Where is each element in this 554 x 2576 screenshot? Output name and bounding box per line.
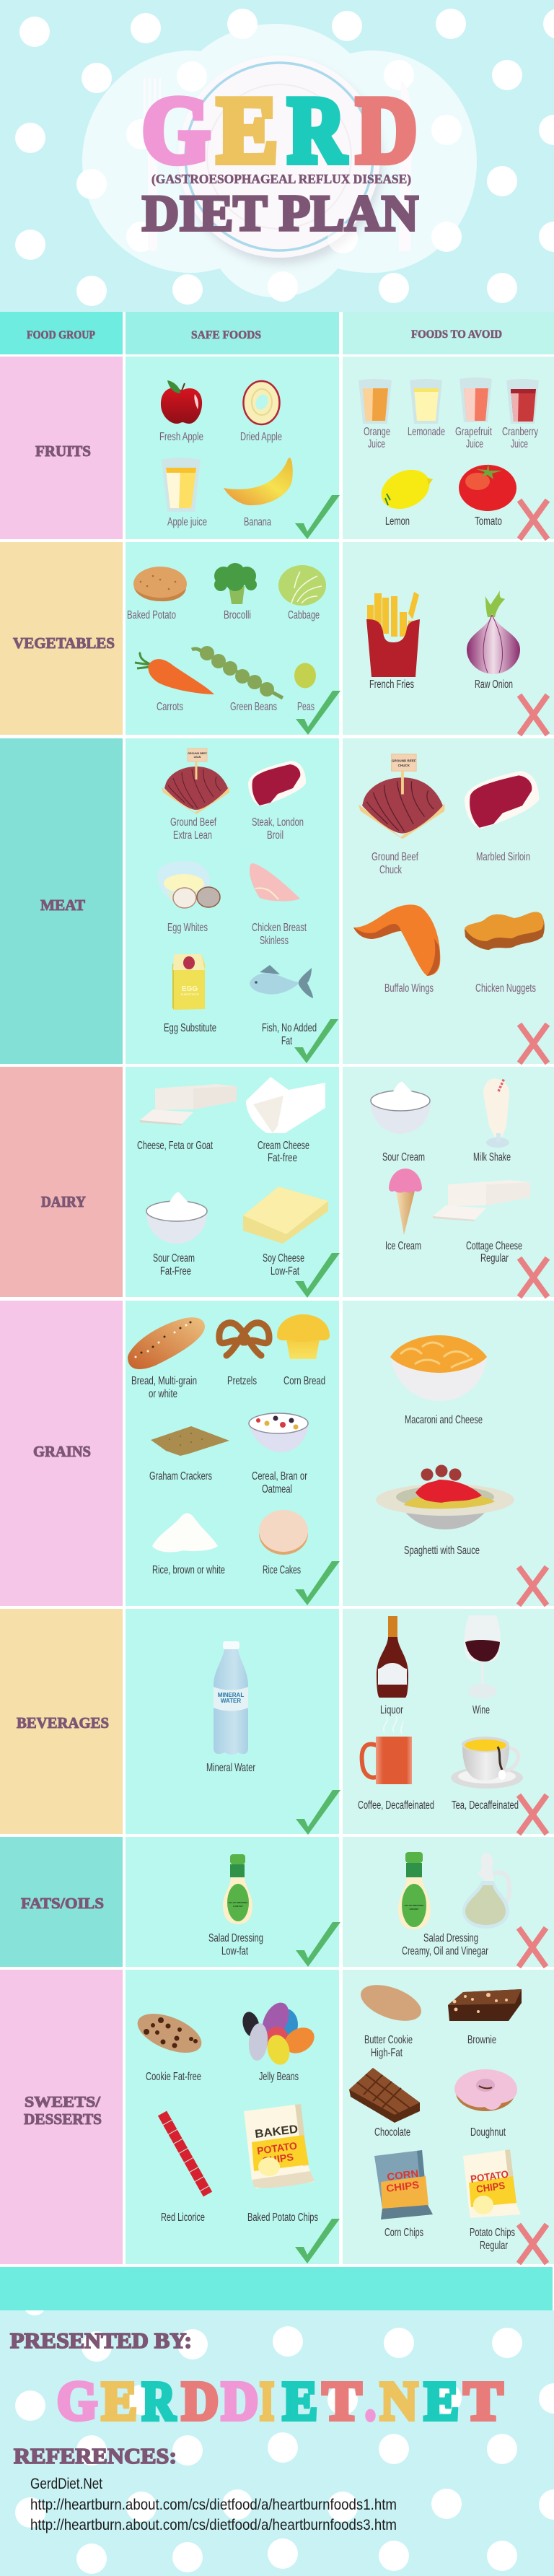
icon: mineral water bottle bbox=[214, 1641, 248, 1755]
icon: egg substitute carton: EGG bbox=[182, 985, 198, 993]
icon: grapefruit juice bbox=[460, 377, 492, 422]
panel: beverages bbox=[0, 1609, 554, 1835]
header banner bbox=[0, 0, 554, 312]
label: egg substitute: Egg Substitute bbox=[164, 1022, 216, 1034]
icon: salad dressing low-fat bbox=[223, 1854, 252, 1924]
logo: gerddiet.net: D bbox=[221, 2371, 258, 2432]
label: butter cookie high-fat: High-Fat bbox=[371, 2047, 403, 2059]
icon: sour cream fat-free bbox=[146, 1192, 207, 1244]
icon: steak london broil bbox=[248, 761, 306, 806]
icon: orange juice bbox=[359, 379, 392, 424]
icon: french fries bbox=[366, 592, 420, 677]
icon: salad dressing low-fat: SALAD DRESSING bbox=[229, 1901, 248, 1904]
icon: carrots bbox=[135, 652, 214, 694]
icon: check mark bbox=[296, 1922, 340, 1967]
label: butter cookie high-fat: Butter Cookie bbox=[364, 2034, 413, 2046]
icon: liquor bottle bbox=[377, 1616, 408, 1698]
logo: gerddiet.net: T bbox=[322, 2371, 361, 2432]
label: cottage cheese regular: Regular bbox=[480, 1252, 509, 1265]
label: potato chips regular: Regular bbox=[480, 2240, 508, 2252]
label: bread multi-grain: or white bbox=[149, 1388, 177, 1400]
icon: lemonade bbox=[410, 379, 442, 424]
label: cereal bran or oatmeal: Oatmeal bbox=[262, 1483, 292, 1496]
icon: check mark bbox=[294, 1019, 338, 1063]
panel: sweets and desserts bbox=[0, 1970, 554, 2264]
title: GERD: G bbox=[142, 78, 210, 183]
label: sour cream fat-free: Fat-Free bbox=[160, 1265, 191, 1278]
icon: x mark bbox=[519, 1795, 547, 1834]
icon: egg whites bbox=[157, 861, 220, 908]
icon: sour cream bbox=[371, 1082, 431, 1134]
icon: pretzel bbox=[219, 1323, 269, 1355]
heading: grains: GRAINS bbox=[33, 1443, 91, 1460]
label: lemon: Lemon bbox=[385, 515, 410, 528]
footer polka-dot background bbox=[0, 2292, 554, 2576]
label: soy cheese low-fat: Low-Fat bbox=[271, 1265, 299, 1278]
icon: chocolate bar bbox=[349, 2068, 420, 2123]
text block: reference list bbox=[30, 2476, 397, 2533]
label: salad dressing creamy oil and vinegar bbox=[402, 1932, 488, 1957]
label: ground beef chuck: Ground Beef bbox=[371, 851, 419, 863]
icon: lemon bbox=[375, 463, 436, 516]
icon: corn chips: CHIPS bbox=[385, 2178, 420, 2194]
label: egg whites: Egg Whites bbox=[167, 922, 208, 934]
icon: chicken nuggets bbox=[465, 912, 545, 950]
icon: baked potato chips: POTATO bbox=[256, 2139, 298, 2157]
label: rice cakes: Rice Cakes bbox=[263, 1564, 301, 1576]
icon: fish bbox=[250, 965, 313, 998]
label: butter cookie high-fat bbox=[364, 2034, 413, 2059]
panel: grains bbox=[0, 1301, 554, 1606]
icon: check mark bbox=[295, 2219, 340, 2263]
icon: green beans bbox=[192, 646, 283, 698]
label: salad dressing low-fat: Salad Dressing bbox=[208, 1932, 263, 1944]
label: orange juice: Orange bbox=[364, 426, 390, 438]
label: brownie: Brownie bbox=[467, 2034, 496, 2046]
icon: x mark bbox=[519, 500, 548, 539]
label: jelly beans: Jelly Beans bbox=[259, 2071, 299, 2083]
label: baked potato: Baked Potato bbox=[127, 609, 176, 621]
table header row: FOOD GROUP bbox=[27, 329, 95, 341]
icon: potato chips regular: POTATO bbox=[470, 2168, 509, 2185]
icon: raw onion bbox=[467, 590, 520, 674]
heading: presented by: PRESENTED BY: bbox=[10, 2328, 192, 2353]
label: cookie fat-free: Cookie Fat-free bbox=[146, 2071, 201, 2083]
teal bar bbox=[0, 2267, 553, 2310]
label: cream cheese fat-free bbox=[258, 1140, 309, 1164]
label: cereal bran or oatmeal bbox=[252, 1470, 307, 1496]
title: GERD: D bbox=[356, 78, 417, 183]
title: GERD bbox=[142, 78, 417, 183]
icon: buffalo wings bbox=[353, 904, 440, 976]
logo: gerddiet.net: G bbox=[57, 2371, 97, 2432]
icon: ground beef extra lean bbox=[162, 748, 229, 814]
heading: fruits: FRUITS bbox=[35, 442, 91, 460]
label: potato chips regular: Potato Chips bbox=[470, 2227, 515, 2239]
icon: tomato bbox=[459, 463, 516, 511]
icon: ground beef chuck bbox=[359, 754, 444, 839]
panel: meat bbox=[0, 738, 554, 1064]
label: fish no added fat: Fat bbox=[281, 1035, 292, 1047]
label: ground beef chuck: Chuck bbox=[379, 864, 402, 876]
label: dried apple: Dried Apple bbox=[240, 431, 282, 443]
icon: check mark bbox=[296, 691, 340, 735]
title: GERD: R bbox=[288, 78, 346, 183]
icon: ice cream bbox=[389, 1169, 422, 1235]
label: ice cream: Ice Cream bbox=[385, 1240, 421, 1252]
icon: corn bread bbox=[277, 1314, 330, 1359]
table header row: FOODS TO AVOID bbox=[411, 328, 502, 341]
icon: marbled sirloin bbox=[465, 771, 539, 829]
table header row: SAFE FOODS bbox=[191, 329, 261, 341]
icon: cereal bbox=[249, 1413, 309, 1452]
icon: salad dressing creamy: SALAD DRESSING bbox=[405, 1904, 424, 1907]
text block: reference list: http://heartburn.about.com/cs/dietfood/a/heartburnfoods1.htm bbox=[30, 2497, 397, 2513]
heading: references: REFERENCES: bbox=[14, 2443, 177, 2468]
logo: gerddiet.net: E bbox=[102, 2371, 137, 2432]
title: GERD: E bbox=[217, 78, 278, 183]
label: ground beef extra lean: Ground Beef bbox=[170, 816, 216, 829]
logo: gerddiet.net: D bbox=[182, 2371, 219, 2432]
label: salad dressing creamy oil and vinegar: Salad Dressing bbox=[423, 1932, 478, 1944]
icon: rice cakes bbox=[259, 1510, 308, 1555]
icon: ground beef extra lean: GROUND BEEF bbox=[188, 752, 208, 755]
label: steak london broil: Broil bbox=[267, 829, 283, 842]
icon: check mark bbox=[295, 1253, 340, 1298]
icon: check mark bbox=[296, 1790, 340, 1835]
text block: reference list: GerdDiet.Net bbox=[30, 2476, 102, 2492]
icon: mineral water bottle: MINERAL bbox=[218, 1692, 244, 1698]
heading: sweets and desserts: SWEETS/ bbox=[25, 2093, 101, 2110]
label: cheese feta or goat: Cheese, Feta or Goat bbox=[137, 1140, 213, 1152]
label: chicken breast skinless bbox=[252, 922, 307, 947]
icon: fresh apple bbox=[161, 380, 202, 424]
icon: ground beef chuck: GROUND BEEF bbox=[392, 759, 416, 762]
icon: soy cheese bbox=[243, 1187, 328, 1244]
icon: potato chips regular: CHIPS bbox=[475, 2180, 506, 2195]
label: sour cream fat-free bbox=[153, 1252, 195, 1278]
label: macaroni and cheese: Macaroni and Cheese bbox=[405, 1414, 483, 1426]
label: wine: Wine bbox=[472, 1704, 490, 1716]
icon: baked potato bbox=[133, 567, 187, 601]
label: fish no added fat bbox=[262, 1022, 317, 1047]
logo: gerddiet.net bbox=[57, 2371, 503, 2432]
heading: sweets and desserts bbox=[24, 2093, 102, 2128]
label: salad dressing low-fat: Low-fat bbox=[221, 1945, 248, 1957]
icon: egg substitute carton bbox=[172, 954, 205, 1010]
logo: gerddiet.net: T bbox=[464, 2371, 503, 2432]
icon: fork bbox=[144, 78, 161, 251]
icon: x mark bbox=[519, 695, 548, 735]
icon: oil and vinegar cruet bbox=[462, 1853, 509, 1929]
heading: fats and oils: FATS/OILS bbox=[21, 1895, 104, 1912]
label: grapefruit juice: Juice bbox=[466, 438, 483, 450]
label: liquor: Liquor bbox=[380, 1704, 403, 1716]
label: soy cheese low-fat: Soy Cheese bbox=[263, 1252, 304, 1265]
panel: dairy bbox=[0, 1067, 554, 1298]
icon: x mark bbox=[519, 1258, 548, 1297]
label: cottage cheese regular bbox=[466, 1240, 522, 1265]
plate illustration bbox=[178, 56, 382, 264]
logo: gerddiet.net: . bbox=[365, 2371, 376, 2432]
icon: banana bbox=[224, 458, 293, 505]
label: cabbage: Cabbage bbox=[288, 609, 320, 621]
label: carrots: Carrots bbox=[157, 701, 183, 713]
label: milk shake: Milk Shake bbox=[473, 1151, 511, 1163]
heading: beverages: BEVERAGES bbox=[17, 1714, 109, 1732]
label: bread multi-grain: Bread, Multi-grain bbox=[131, 1375, 197, 1387]
table header row bbox=[0, 312, 554, 354]
icon: ground beef extra lean: LEAN bbox=[194, 756, 201, 759]
label: cranberry juice: Juice bbox=[511, 438, 528, 450]
label: cranberry juice: Cranberry bbox=[502, 426, 538, 438]
icon: peas bbox=[294, 663, 316, 689]
icon: knife bbox=[399, 81, 412, 251]
icon: mineral water bottle: WATER bbox=[221, 1698, 241, 1704]
label: soy cheese low-fat bbox=[263, 1252, 304, 1278]
label: baked potato chips: Baked Potato Chips bbox=[247, 2212, 318, 2224]
logo: gerddiet.net: I bbox=[260, 2371, 274, 2432]
label: sour cream: Sour Cream bbox=[382, 1151, 425, 1163]
label: salad dressing creamy oil and vinegar: Creamy, Oil and Vinegar bbox=[402, 1945, 488, 1957]
icon: macaroni and cheese bbox=[390, 1335, 487, 1401]
label: cranberry juice bbox=[502, 426, 538, 450]
icon: x mark bbox=[519, 1928, 546, 1967]
icon: jelly beans bbox=[240, 1999, 319, 2067]
icon: cookie bbox=[132, 2006, 207, 2061]
label: potato chips regular bbox=[470, 2227, 515, 2252]
icon: baked potato chips bbox=[244, 2104, 315, 2188]
icon: salad dressing low-fat: LOW-FAT bbox=[233, 1905, 243, 1908]
label: orange juice: Juice bbox=[368, 438, 385, 450]
label: steak london broil: Steak, London bbox=[252, 816, 304, 829]
label: apple juice: Apple juice bbox=[167, 516, 207, 528]
label: marbled sirloin: Marbled Sirloin bbox=[476, 851, 530, 863]
icon: x mark bbox=[519, 1567, 547, 1605]
icon: dried apple bbox=[244, 381, 280, 424]
icon: cabbage bbox=[278, 565, 326, 606]
icon: baked potato chips: CHIPS bbox=[261, 2151, 294, 2167]
icon: chicken breast bbox=[250, 863, 300, 901]
label: grapefruit juice bbox=[455, 426, 493, 450]
label: mineral water: Mineral Water bbox=[206, 1762, 255, 1774]
label: steak london broil bbox=[252, 816, 304, 842]
label: cream cheese fat-free: Cream Cheese bbox=[258, 1140, 309, 1152]
label: banana: Banana bbox=[244, 516, 271, 528]
icon: cream cheese bbox=[246, 1077, 325, 1133]
label: tomato: Tomato bbox=[475, 515, 502, 528]
label: orange juice bbox=[364, 426, 390, 450]
label: ground beef extra lean bbox=[170, 816, 216, 842]
icon: coffee mug bbox=[362, 1716, 412, 1784]
icon: milk shake bbox=[483, 1078, 509, 1148]
label: lemonade: Lemonade bbox=[408, 426, 445, 438]
heading: sweets and desserts: DESSERTS bbox=[24, 2110, 102, 2128]
label: raw onion: Raw Onion bbox=[475, 678, 513, 691]
label: ground beef extra lean: Extra Lean bbox=[173, 829, 212, 842]
icon: check mark bbox=[295, 495, 340, 539]
label: green beans: Green Beans bbox=[230, 701, 277, 713]
label: chicken breast skinless: Skinless bbox=[260, 935, 289, 947]
icon: graham crackers bbox=[151, 1426, 229, 1456]
label: coffee decaffeinated: Coffee, Decaffeinated bbox=[358, 1799, 434, 1812]
label: pretzels: Pretzels bbox=[227, 1375, 257, 1387]
label: red licorice: Red Licorice bbox=[161, 2212, 205, 2224]
icon: salad dressing creamy bbox=[398, 1852, 431, 1929]
label: cereal bran or oatmeal: Cereal, Bran or bbox=[252, 1470, 307, 1483]
label: grapefruit juice: Grapefruit bbox=[455, 426, 493, 438]
label: graham crackers: Graham Crackers bbox=[149, 1470, 212, 1483]
label: corn chips: Corn Chips bbox=[384, 2227, 423, 2239]
logo: gerddiet.net: E bbox=[424, 2371, 459, 2432]
heading: vegetables: VEGETABLES bbox=[13, 634, 115, 652]
icon: salad dressing creamy: CREAMY bbox=[409, 1908, 419, 1911]
heading: meat: MEAT bbox=[40, 896, 85, 914]
label: sour cream fat-free: Sour Cream bbox=[153, 1252, 195, 1265]
logo: gerddiet.net: R bbox=[142, 2371, 176, 2432]
logo: gerddiet.net: E bbox=[283, 2371, 317, 2432]
text block: reference list: http://heartburn.about.com/cs/dietfood/a/heartburnfoods3.htm bbox=[30, 2517, 397, 2533]
panel: fruits bbox=[0, 357, 554, 539]
label: chocolate: Chocolate bbox=[374, 2126, 410, 2139]
icon: bread bbox=[128, 1317, 205, 1369]
icon: corn chips: CORN bbox=[386, 2167, 419, 2183]
icon: brownie bbox=[448, 1989, 522, 2021]
label: spaghetti with sauce: Spaghetti with Sauce bbox=[404, 1545, 480, 1557]
icon: broccoli bbox=[214, 563, 257, 604]
icon: egg substitute carton: SUBSTITUTE bbox=[180, 992, 199, 996]
label: bread multi-grain bbox=[131, 1375, 197, 1400]
label: fresh apple: Fresh Apple bbox=[159, 431, 203, 443]
icon: cottage cheese bbox=[433, 1180, 530, 1221]
label: buffalo wings: Buffalo Wings bbox=[384, 982, 434, 995]
title: diet plan: DIET PLAN bbox=[142, 185, 418, 242]
icon: spaghetti with sauce bbox=[376, 1465, 514, 1529]
icon: baked potato chips: BAKED bbox=[254, 2123, 299, 2141]
icon: check mark bbox=[295, 1561, 340, 1605]
icon: apple juice bbox=[162, 458, 201, 512]
icon: ground beef chuck: CHUCK bbox=[398, 764, 410, 767]
icon: corn chips bbox=[374, 2150, 433, 2219]
label: salad dressing low-fat bbox=[208, 1932, 263, 1957]
icon: feta cheese bbox=[140, 1084, 237, 1125]
icon: potato chips regular bbox=[463, 2149, 521, 2218]
subtitle: gastroesophageal reflux disease: (GASTROESOPHAGEAL REFLUX DISEASE) bbox=[151, 172, 411, 186]
label: french fries: French Fries bbox=[369, 678, 414, 691]
label: chicken breast skinless: Chicken Breast bbox=[252, 922, 307, 934]
icon: tea cup bbox=[451, 1737, 523, 1789]
icon: wine glass bbox=[464, 1615, 501, 1698]
label: tea decaffeinated: Tea, Decaffeinated bbox=[452, 1799, 519, 1812]
logo: gerddiet.net: N bbox=[380, 2371, 418, 2432]
label: rice brown or white: Rice, brown or white bbox=[152, 1564, 225, 1576]
label: peas: Peas bbox=[297, 701, 315, 713]
label: broccoli: Brocolli bbox=[224, 609, 251, 621]
panel: vegetables bbox=[0, 542, 554, 735]
label: ground beef chuck bbox=[371, 851, 419, 876]
icon: x mark bbox=[519, 2224, 547, 2263]
heading: dairy: DAIRY bbox=[41, 1193, 86, 1210]
icon: x mark bbox=[519, 1024, 548, 1063]
icon: red licorice bbox=[162, 2113, 208, 2194]
icon: doughnut bbox=[454, 2069, 517, 2111]
label: corn bread: Corn Bread bbox=[283, 1375, 325, 1387]
icon: cranberry juice bbox=[506, 379, 539, 424]
label: fish no added fat: Fish, No Added bbox=[262, 1022, 317, 1034]
label: cream cheese fat-free: Fat-free bbox=[268, 1152, 297, 1164]
icon: rice bbox=[152, 1514, 218, 1552]
label: doughnut: Doughnut bbox=[470, 2126, 506, 2139]
icon: butter cookie bbox=[356, 1978, 426, 2028]
panel: fats and oils bbox=[0, 1837, 554, 1967]
label: cottage cheese regular: Cottage Cheese bbox=[466, 1240, 522, 1252]
